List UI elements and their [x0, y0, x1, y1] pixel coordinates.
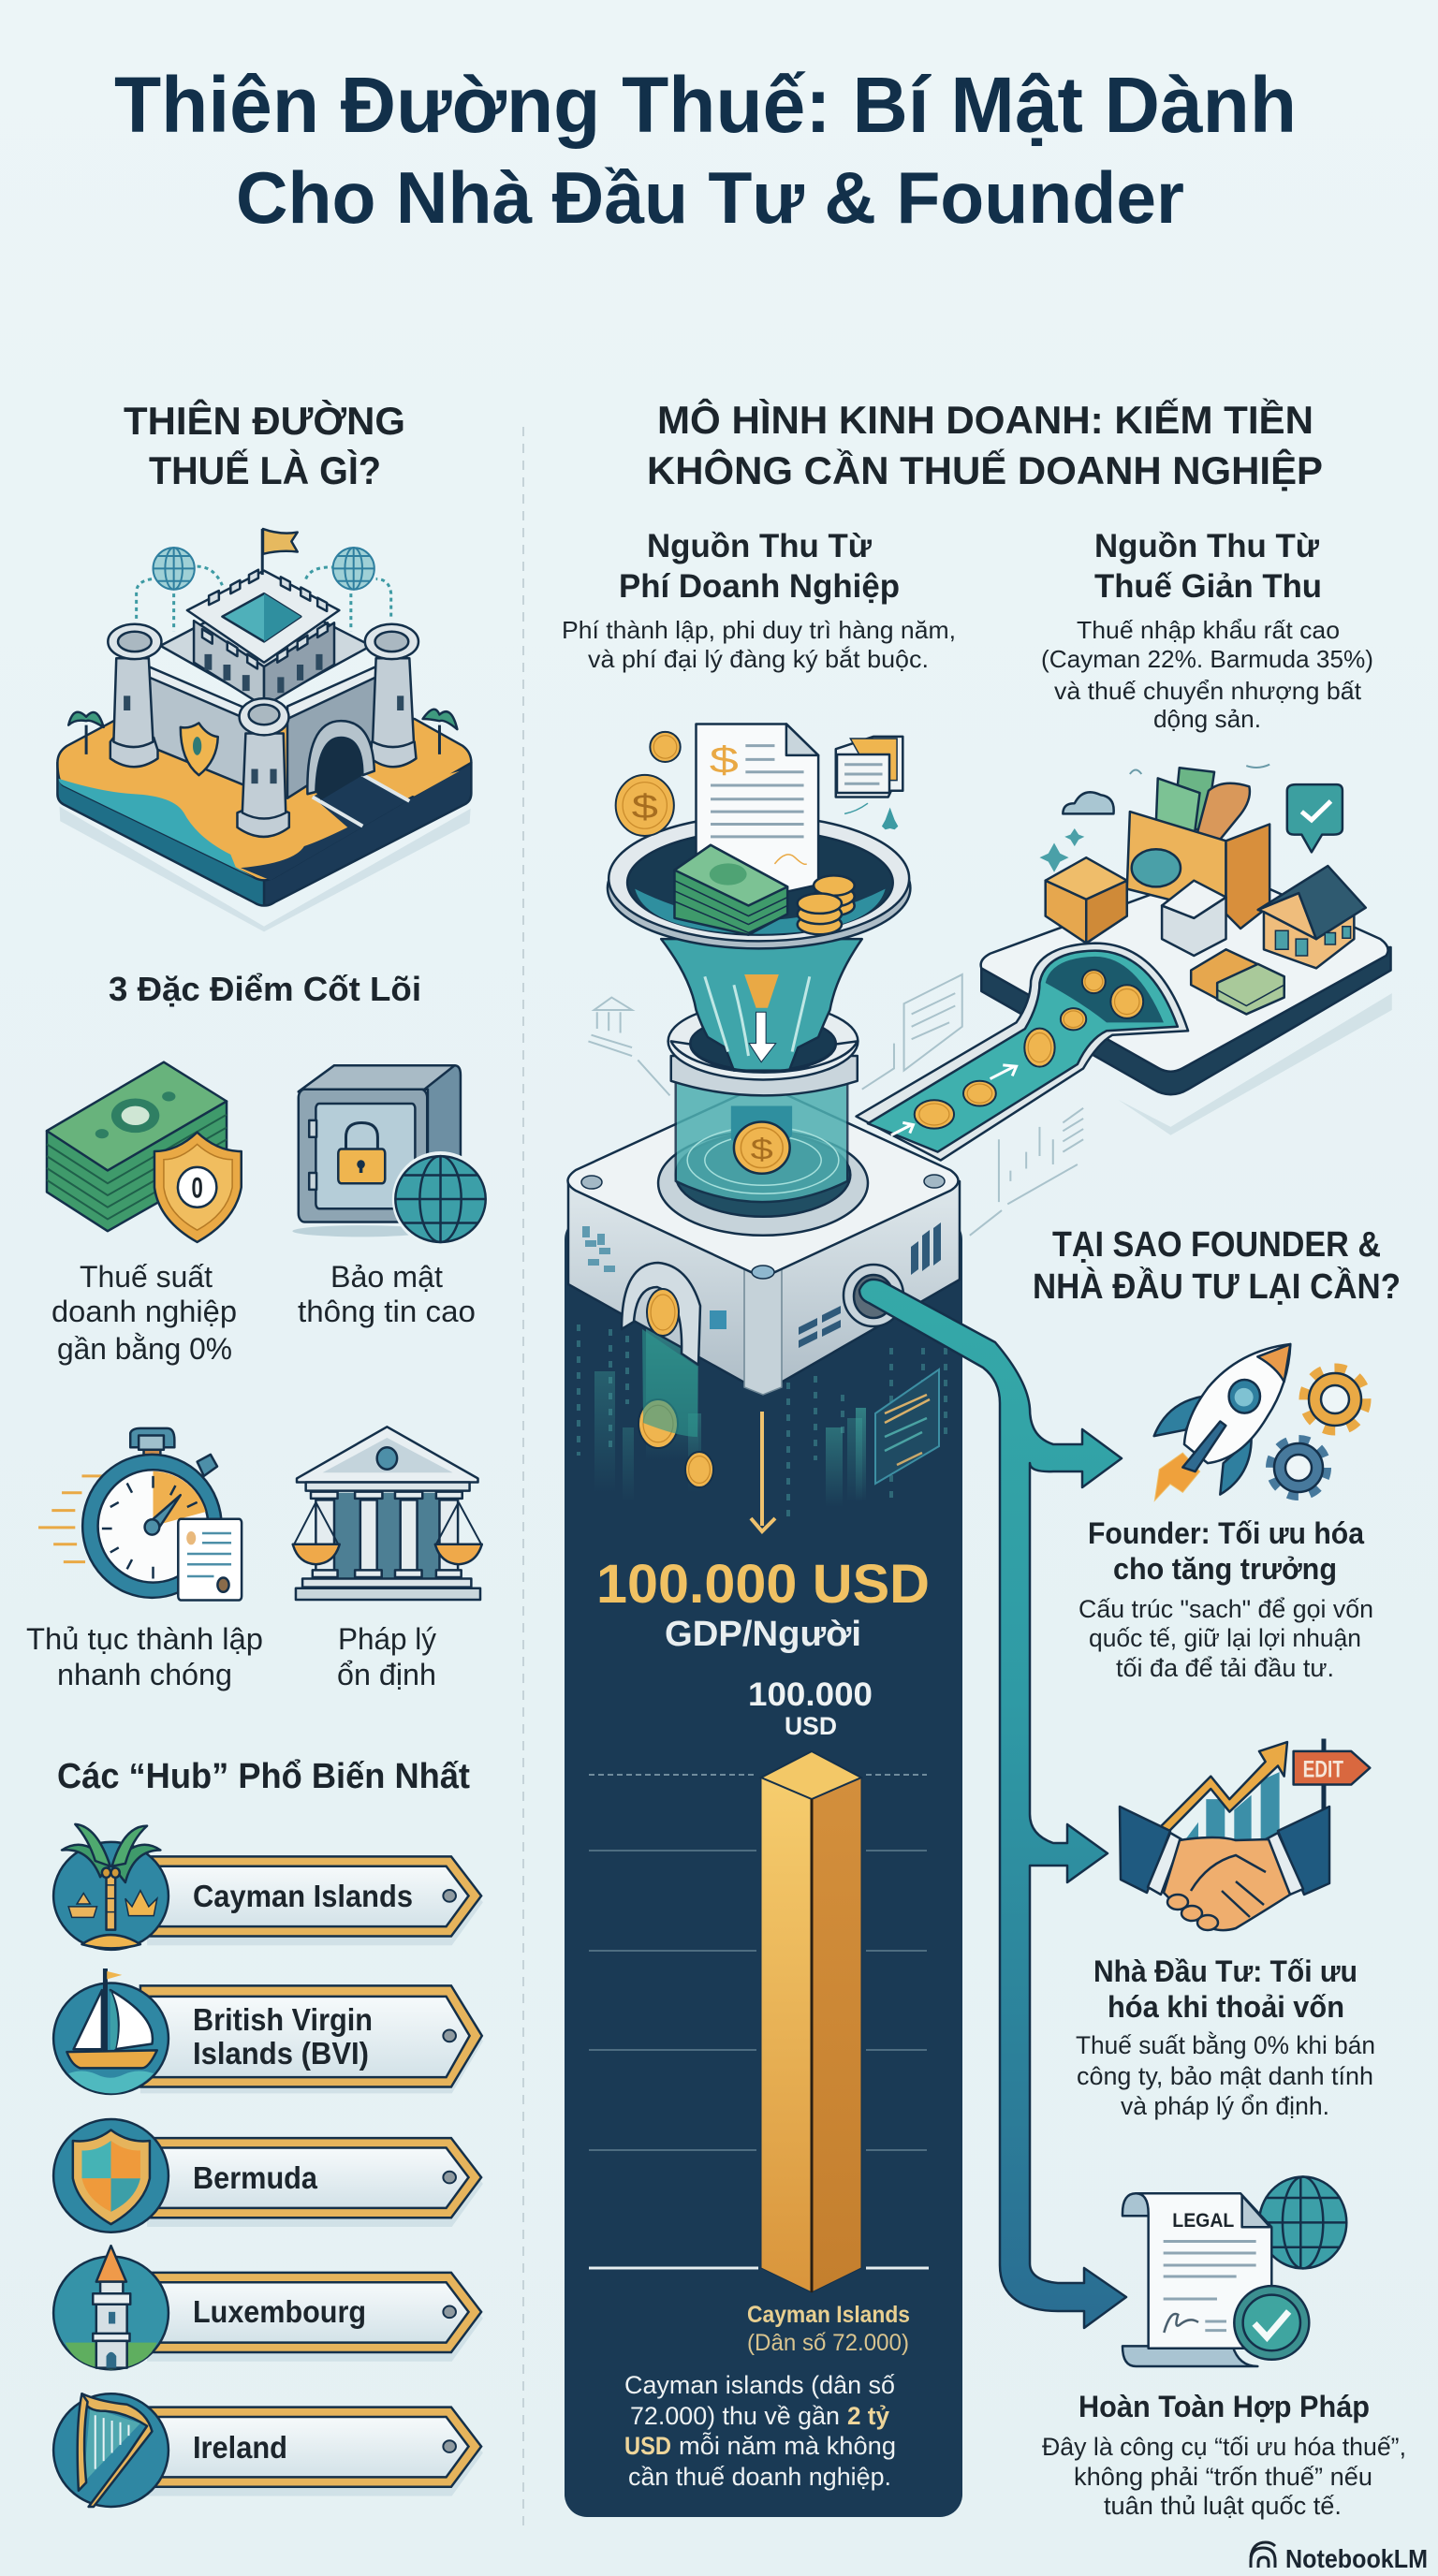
- revenue: indirect taxes: (Cayman 22%. Barmuda 35%): [1041, 645, 1373, 673]
- gold arrow: [751, 1412, 775, 1531]
- icon: stopwatch with document: [38, 1428, 242, 1600]
- panel note: cần thuế doanh nghiệp.: [628, 2463, 891, 2491]
- bar value: USD: [785, 1712, 837, 1740]
- wall shield: [181, 723, 218, 775]
- icon: rocket and gears: [1154, 1344, 1365, 1500]
- label: ổn định: [337, 1658, 436, 1691]
- text: legal: Đây là công cụ “tối ưu hóa thuế”,: [1042, 2433, 1406, 2461]
- revenue: indirect taxes: Thuế Giản Thu: [1094, 568, 1322, 605]
- label: [337, 1622, 436, 1691]
- panel data background: [579, 1310, 946, 1516]
- heading: business model: MÔ HÌNH KINH DOANH: KIẾM TIỀN: [657, 397, 1313, 442]
- label: Thủ tục thành lập: [26, 1622, 263, 1656]
- hub: Ireland: Ireland: [193, 2430, 287, 2465]
- icon: money stack with zero shield: [47, 1062, 242, 1242]
- revenue: corporate fees: Nguồn Thu Từ: [647, 528, 873, 564]
- icon: legal document with globe and check: [1123, 2176, 1346, 2366]
- illustration: island fortress: [57, 529, 471, 931]
- base ring and glass cylinder: [658, 1003, 868, 1236]
- icon: sailboat: [53, 1969, 169, 2094]
- falling coins: [638, 1399, 713, 1487]
- outer walls: [149, 673, 260, 792]
- bar chart column: [761, 1751, 861, 2292]
- revenue: indirect taxes: dộng sản.: [1153, 705, 1261, 733]
- text: founder: Cấu trúc "sach" để gọi vốn: [1078, 1595, 1373, 1623]
- icon: shield: [53, 2119, 169, 2232]
- funnel: [608, 816, 910, 1073]
- revenue: indirect taxes: Nguồn Thu Từ: [1094, 528, 1320, 564]
- title: Thiên Đường Thuế: Bí Mật Dành: [114, 61, 1297, 149]
- revenue: corporate fees: và phí đại lý đàng ký bắt buộc.: [588, 645, 929, 673]
- text: founder: Founder: Tối ưu hóa: [1088, 1516, 1364, 1550]
- heading: popular hubs: Các “Hub” Phổ Biến Nhất: [57, 1757, 470, 1796]
- stat label: GDP/Người: [665, 1615, 861, 1654]
- bar value: [748, 1676, 873, 1740]
- text: investor: Thuế suất bằng 0% khi bán: [1076, 2030, 1375, 2059]
- box: [1046, 857, 1127, 944]
- text: legal: [1042, 2390, 1406, 2520]
- illustration: revenue platform with conveyor: [857, 765, 1392, 1161]
- text: founder: cho tăng trưởng: [1113, 1552, 1337, 1586]
- grey cube: [1162, 881, 1226, 956]
- label: Pháp lý: [338, 1622, 436, 1656]
- text: investor: [1076, 1954, 1375, 2120]
- heading: what is a tax haven: THUẾ LÀ GÌ?: [149, 448, 381, 492]
- text: founder: [1078, 1516, 1373, 1682]
- revenue: corporate fees: Phí thành lập, phi duy trì hàng năm,: [562, 616, 956, 644]
- bar value: 100.000: [748, 1676, 873, 1713]
- hub: Luxembourg: Luxembourg: [193, 2294, 366, 2329]
- heading: what is a tax haven: THIÊN ĐƯỜNG: [124, 398, 405, 443]
- heading: why founders and investors need it: [1033, 1225, 1401, 1307]
- house: [1258, 866, 1366, 968]
- heading: what is a tax haven: [124, 398, 405, 492]
- bar label: (Dân số 72.000): [747, 2330, 909, 2356]
- money stack: [1191, 949, 1284, 1014]
- icon: money stack with zero shield: 0: [191, 1171, 203, 1204]
- text: founder: quốc tế, giữ lại lợi nhuận: [1089, 1624, 1361, 1652]
- heading: why founders and investors need it: TẠI SAO FOUNDER &: [1052, 1225, 1381, 1265]
- label: gần bằng 0%: [57, 1332, 232, 1366]
- revenue: indirect taxes: và thuế chuyển nhượng bất: [1054, 677, 1362, 705]
- heading: 3 core traits: 3 Đặc Điểm Cốt Lõi: [109, 970, 421, 1008]
- branching arrows: [844, 1265, 1126, 2328]
- text: investor: Nhà Đầu Tư: Tối ưu: [1093, 1954, 1357, 1988]
- revenue: indirect taxes: [1041, 528, 1373, 733]
- hub: Bermuda: Bermuda: [193, 2160, 318, 2195]
- label: [26, 1622, 263, 1691]
- faint background icons: [588, 974, 1083, 1236]
- trait: stable legal system: [293, 1427, 482, 1691]
- text: investor: công ty, bảo mật danh tính: [1077, 2062, 1373, 2090]
- hub: British Virgin Islands: British Virgin: [193, 2002, 373, 2037]
- heading: business model: [647, 397, 1323, 492]
- title: Cho Nhà Đầu Tư & Founder: [236, 156, 1184, 239]
- label: Bảo mật: [330, 1260, 443, 1294]
- text: founder: tối đa để tải đầu tư.: [1116, 1654, 1334, 1682]
- heading: business model: KHÔNG CẦN THUẾ DOANH NGHIỆP: [647, 447, 1323, 492]
- icon: palm island: [53, 1824, 169, 1950]
- icon: courthouse with scales: [293, 1427, 482, 1600]
- cloud: [1063, 792, 1114, 813]
- hub: British Virgin Islands: Islands (BVI): [193, 2036, 369, 2071]
- globes: [137, 548, 391, 631]
- machine block: [567, 1088, 960, 1395]
- text: legal: không phải “trốn thuế” nếu: [1074, 2463, 1372, 2491]
- revenue: indirect taxes: Thuế nhập khẩu rất cao: [1077, 616, 1340, 644]
- towers: [108, 624, 418, 837]
- label: Thuế suất: [80, 1260, 213, 1294]
- text: investor: hóa khi thoải vốn: [1108, 1990, 1344, 2024]
- bar label: Cayman Islands: [747, 2302, 910, 2328]
- label: [51, 1260, 237, 1366]
- icon: legal document with globe and check: LEGAL: [1172, 2210, 1234, 2232]
- sparkles: [1039, 828, 1084, 872]
- trait: fast incorporation: [26, 1428, 263, 1691]
- funnel contents: $: [632, 788, 658, 826]
- heading: why founders and investors need it: NHÀ ĐẦU TƯ LẠI CẦN?: [1033, 1266, 1401, 1307]
- funnel contents: $: [710, 739, 739, 782]
- panel note: [624, 2371, 896, 2491]
- coin gate: [622, 1263, 700, 1437]
- trait: confidentiality: [292, 1065, 489, 1328]
- hub: British Virgin Islands: [53, 1969, 483, 2094]
- dark panel: GDP per capita: [565, 1217, 962, 2517]
- bag of goods: [1127, 768, 1269, 929]
- funnel contents: [616, 724, 902, 935]
- base ring and glass cylinder: $: [751, 1134, 773, 1166]
- panel note: 2 tỷ: [847, 2402, 889, 2430]
- hub: Cayman Islands: [53, 1824, 483, 1950]
- panel note: USD: [624, 2432, 671, 2460]
- conveyor chute: [857, 944, 1188, 1161]
- hub: Cayman Islands: Cayman Islands: [193, 1879, 413, 1913]
- icon: handshake and growth chart: EDIT: [1303, 1756, 1343, 1782]
- illustration: funnel and machine: [567, 724, 960, 1437]
- label: [298, 1260, 476, 1328]
- text: legal: Hoàn Toàn Hợp Pháp: [1078, 2390, 1370, 2423]
- panel note: mỗi năm mà không: [679, 2431, 896, 2460]
- icon: safe with globe: [292, 1065, 489, 1247]
- revenue: corporate fees: [562, 528, 956, 673]
- panel note: Cayman islands (dân số: [624, 2371, 895, 2399]
- label: doanh nghiệp: [51, 1295, 237, 1328]
- keep: [194, 621, 264, 707]
- flag: [262, 529, 298, 575]
- big stat: 100.000 USD: [596, 1554, 930, 1615]
- text: investor: và pháp lý ổn định.: [1121, 2092, 1329, 2120]
- hub: Ireland: [53, 2393, 483, 2507]
- label: nhanh chóng: [57, 1658, 232, 1691]
- icon: harp: [53, 2393, 169, 2507]
- bar label: [747, 2302, 910, 2356]
- icon: handshake and growth chart: [1120, 1739, 1370, 1930]
- panel note: 72.000) thu về gần: [630, 2402, 840, 2430]
- hub: Bermuda: [53, 2119, 483, 2232]
- text: legal: tuân thủ luật quốc tế.: [1104, 2492, 1342, 2520]
- hub: Luxembourg: [53, 2246, 483, 2369]
- trait: near zero tax: [47, 1062, 242, 1366]
- icon: tower: [53, 2246, 169, 2369]
- check bubble: [1287, 784, 1343, 852]
- revenue: corporate fees: Phí Doanh Nghiệp: [619, 568, 900, 605]
- label: thông tin cao: [298, 1295, 476, 1328]
- title: [114, 61, 1297, 239]
- gate: [307, 721, 374, 794]
- palms: [68, 710, 457, 754]
